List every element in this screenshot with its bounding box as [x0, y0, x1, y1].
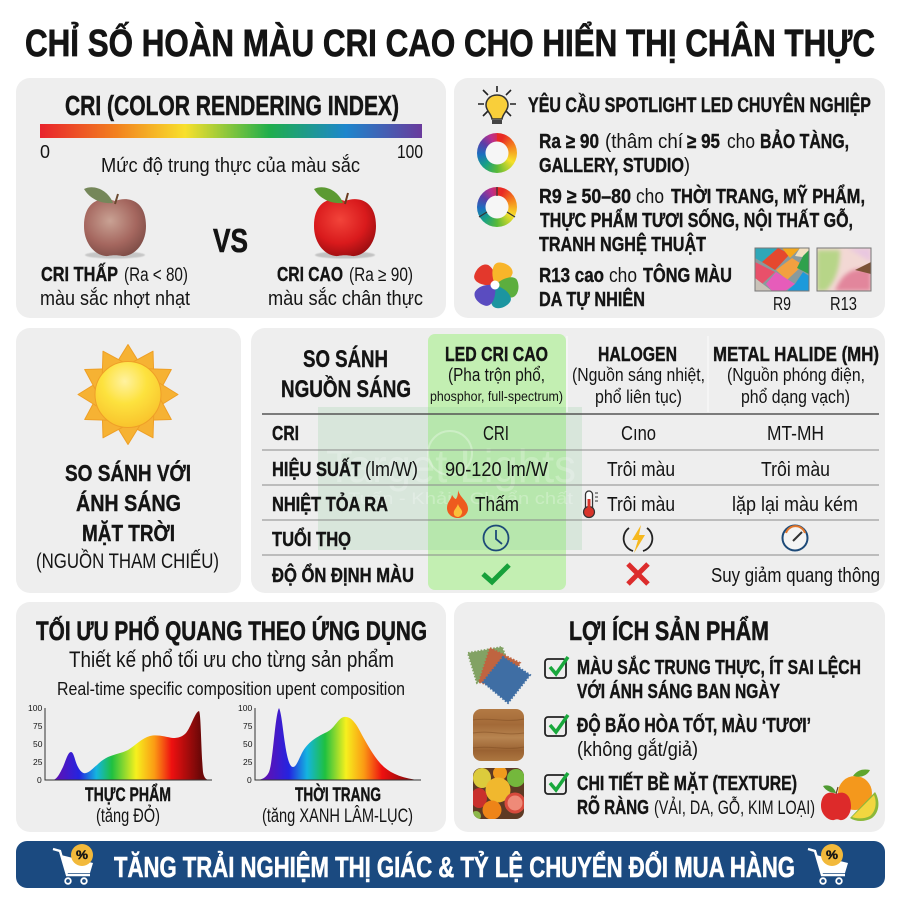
row: efficiency: (lm/W)	[365, 459, 418, 481]
scale label 100: 100	[397, 142, 423, 162]
table heading: SO SÁNH	[303, 345, 388, 373]
icon: light bulb	[478, 86, 516, 124]
scale caption: Mức độ trung thực của màu sắc	[101, 154, 360, 177]
column header: metal halide: phổ dạng vạch)	[741, 387, 850, 407]
panel: sunlight reference	[16, 328, 241, 593]
icon: clock	[484, 526, 508, 550]
chart: fashion spectrum: 50	[243, 739, 253, 749]
vs label: VS	[213, 222, 248, 259]
icon: right shopping cart	[808, 844, 848, 884]
icon: left shopping cart	[53, 844, 93, 884]
requirement Ra text: Ra ≥ 90	[539, 131, 599, 153]
icon: green check	[483, 565, 509, 582]
chart label: food	[85, 784, 171, 827]
requirement Ra text: cho	[727, 131, 755, 153]
swatch: R13 skin tones	[817, 248, 871, 291]
chart: fashion spectrum	[238, 703, 421, 785]
requirement Ra text: (thâm chí	[605, 131, 683, 153]
icon: left shopping cart: %	[76, 848, 88, 862]
row: heat: Thấm	[475, 494, 519, 516]
chart: food spectrum: 75	[33, 721, 43, 731]
requirement R13 text: cho	[609, 265, 637, 287]
column header: halogen: (Nguồn sáng nhiệt,	[572, 365, 705, 385]
row: lifetime	[272, 525, 808, 553]
high CRI label: (Ra ≥ 90)	[349, 265, 413, 286]
icon: checkbox 3	[545, 773, 568, 794]
column header: LED: LED CRI CAO	[445, 344, 548, 366]
icon: checkbox 2	[545, 715, 568, 736]
column header: halogen: HALOGEN	[598, 344, 677, 366]
icon: thermometer	[584, 491, 598, 518]
requirement R9 text: cho	[636, 186, 664, 208]
icon: color ring R9	[477, 187, 517, 227]
column header: halogen	[572, 344, 705, 407]
banner	[16, 841, 885, 888]
row: CRI	[272, 423, 824, 445]
row: efficiency: Trôi màu	[761, 459, 830, 481]
row: lifetime: TUỔI THỌ	[272, 527, 351, 551]
chart: food spectrum: 50	[33, 739, 43, 749]
chart: food spectrum: 25	[33, 757, 43, 767]
caption: Real-time specific composition upent composition	[57, 679, 405, 699]
highlighted LED column	[428, 334, 566, 590]
label R13: R13	[830, 294, 857, 314]
chart: food spectrum: 100	[28, 703, 42, 713]
sunlight label: MẶT TRỜI	[82, 519, 175, 546]
icon: gauge	[782, 526, 808, 550]
chart label: fashion: (tăng XANH LÂM-LỤC)	[262, 805, 413, 827]
heading: benefits: LỢI ÍCH SẢN PHẨM	[569, 614, 769, 646]
low CRI label	[40, 263, 190, 310]
high CRI label	[268, 264, 423, 310]
requirement R13 text: TÔNG MÀU	[643, 263, 732, 287]
requirement R13 text: R13 cao	[539, 265, 604, 287]
requirement Ra text: BẢO TÀNG,	[760, 130, 849, 153]
table heading: NGUỒN SÁNG	[281, 375, 411, 403]
row: efficiency: 90-120 lm/W	[445, 459, 548, 481]
sunlight label: SO SÁNH VỚI	[65, 459, 191, 486]
icon: vivid apple	[314, 187, 376, 258]
icon: fruit photo	[473, 768, 524, 819]
watermark	[318, 407, 582, 550]
high CRI label: CRI CAO	[277, 264, 343, 286]
low CRI label: (Ra < 80)	[124, 265, 188, 286]
swatch: R9 saturated colors	[755, 248, 809, 291]
benefit 2 text: (không gắt/giả)	[577, 738, 698, 761]
high CRI label: màu sắc chân thực	[268, 287, 423, 310]
chart label: fashion: THỜI TRANG	[295, 784, 381, 806]
benefit 3 text	[577, 772, 815, 819]
requirement Ra text: GALLERY, STUDIO	[539, 155, 684, 177]
column header: LED	[430, 344, 563, 404]
panel: comparison table	[251, 328, 885, 593]
panel: spectrum optimization	[16, 602, 446, 832]
chart label: food: (tăng ĐỎ)	[96, 805, 160, 827]
icon: dull apple	[84, 187, 146, 258]
CRI gradient scale bar	[40, 124, 422, 138]
sunlight label	[36, 459, 219, 573]
icon: lightning bolt	[624, 525, 652, 553]
requirement R9 text: R9 ≥ 50–80	[539, 186, 631, 208]
panel: product benefits	[454, 602, 885, 832]
chart: fashion spectrum: 100	[238, 703, 252, 713]
subtitle: Thiết kế phổ tối ưu cho từng sản phẩm	[69, 647, 394, 672]
icon: sun	[78, 344, 178, 444]
column header: metal halide	[713, 344, 879, 407]
requirement Ra text	[539, 130, 849, 177]
row: CRI: Cıno	[621, 423, 656, 445]
icon: checkbox 1	[545, 657, 568, 678]
requirement R13 text: DA TỰ NHIÊN	[539, 287, 645, 311]
row: CRI: MT-MH	[767, 423, 824, 445]
scale label 0: 0	[40, 142, 50, 162]
row: CRI: CRI	[272, 423, 299, 445]
sunlight label: (NGUỒN THAM CHIẾU)	[36, 549, 219, 573]
sunlight label: ÁNH SÁNG	[76, 489, 181, 516]
chart: fashion spectrum: 75	[243, 721, 253, 731]
column header: metal halide: (Nguồn phóng điện,	[727, 365, 865, 385]
column header: halogen: phổ liên tục)	[595, 387, 682, 407]
benefit 2 text: ĐỘ BÃO HÒA TỐT, MÀU ‘TƯƠI’	[577, 713, 811, 737]
row: efficiency	[272, 457, 830, 481]
icon: fruit illustration	[821, 770, 878, 821]
panel: CRI definition	[16, 78, 446, 318]
row: heat: Trôi màu	[607, 494, 675, 516]
table heading	[281, 345, 411, 403]
requirement R9 text	[539, 184, 865, 256]
low CRI label: màu sắc nhợt nhạt	[40, 287, 190, 310]
icon: color ring Ra	[477, 133, 517, 173]
column separators	[567, 336, 708, 412]
chart: fashion spectrum: 25	[243, 757, 253, 767]
panel: spotlight requirements	[454, 78, 885, 318]
row: efficiency: Trôi màu	[607, 459, 675, 481]
requirement R9 text: TRANH NGHỆ THUẬT	[539, 232, 706, 256]
watermark: Target Lights	[326, 440, 576, 492]
column header: LED: (Pha trộn phổ,	[448, 365, 545, 385]
benefit 3 text: CHI TIẾT BỀ MẶT (TEXTURE)	[577, 772, 797, 795]
icon: right shopping cart: %	[826, 848, 838, 862]
icon: wood texture	[473, 709, 524, 761]
row lines	[262, 413, 879, 415]
benefit 2 text	[577, 713, 811, 761]
chart label: food: THỰC PHẨM	[85, 784, 171, 806]
heading: spectrum: TỐI ƯU PHỔ QUANG THEO ỨNG DỤNG	[36, 614, 427, 646]
row: heat: lặp lại màu kém	[732, 494, 858, 516]
benefit 3 text: RÕ RÀNG	[577, 795, 649, 819]
heading: CRI: CRI (COLOR RENDERING INDEX)	[65, 90, 399, 121]
row: efficiency: HIỆU SUẤT	[272, 457, 361, 481]
row: heat: NHIỆT TỎA RA	[272, 492, 388, 516]
low CRI label: CRI THẤP	[41, 263, 118, 286]
chart: food spectrum	[28, 703, 212, 785]
row: color stability	[272, 563, 880, 587]
benefit 1 text	[577, 655, 861, 703]
watermark: Tuấn - Khải - Chuẩn chất	[348, 489, 573, 508]
requirement Ra text: )	[684, 155, 690, 177]
icon: fabric swatches	[468, 647, 530, 703]
icon: color petals R13	[471, 260, 519, 311]
requirement R13 text	[539, 263, 732, 311]
row: color stability: ĐỘ ỔN ĐỊNH MÀU	[272, 563, 414, 587]
icon: red cross	[628, 564, 648, 584]
benefit 1 text: VỚI ÁNH SÁNG BAN NGÀY	[577, 679, 781, 703]
icon: flame	[447, 490, 468, 518]
row: heat	[272, 490, 858, 518]
label R9: R9	[773, 294, 791, 314]
row: CRI: CRI	[483, 423, 509, 445]
requirement Ra text: ≥ 95	[687, 131, 720, 153]
benefit 3 text: (VẢI, DA, GỖ, KIM LOẠI)	[654, 797, 815, 819]
column header: LED: phosphor, full-spectrum)	[430, 388, 563, 404]
chart: food spectrum: 0	[37, 775, 42, 785]
chart: fashion spectrum: 0	[247, 775, 252, 785]
chart label: fashion	[262, 784, 413, 827]
